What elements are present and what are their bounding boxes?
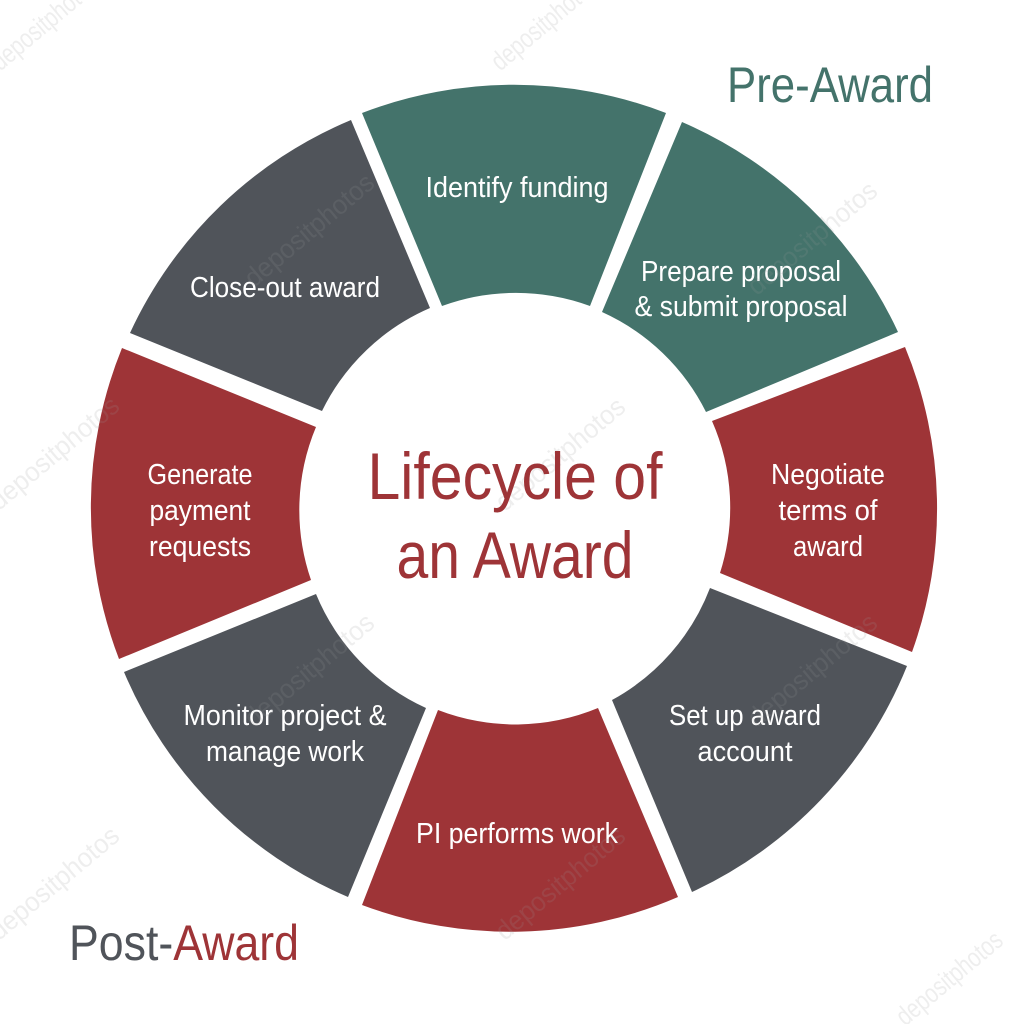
segment: Negotiate terms <box>712 347 937 652</box>
segment: Close-out award <box>130 120 430 411</box>
segment: Prepare proposal: Prepare proposal <box>641 256 841 288</box>
center title <box>368 439 663 592</box>
segment: Generate payment requests: requests <box>149 531 251 563</box>
segment: Generate payment requests <box>91 348 316 659</box>
watermarks: depositphotos <box>741 175 883 301</box>
segment: PI performs work: PI performs work <box>416 818 618 850</box>
segment: Prepare proposal: & submit proposal <box>634 291 848 323</box>
segment: Monitor project <box>124 594 426 897</box>
segment: Generate payment requests: Generate <box>148 459 252 491</box>
segment: Negotiate terms: terms of <box>778 495 878 527</box>
watermarks: depositphotos <box>238 607 380 733</box>
segment: Identify funding <box>362 85 666 306</box>
segment: PI performs work <box>362 708 678 932</box>
watermarks: depositphotos <box>741 607 883 733</box>
segment: Negotiate terms: award <box>793 531 863 563</box>
segment: Monitor project: manage work <box>206 736 364 768</box>
segment: Generate payment requests: payment <box>150 495 250 527</box>
segment: Negotiate terms: Negotiate <box>771 459 885 491</box>
watermarks: depositphotos <box>238 167 380 293</box>
segment: Monitor project: Monitor project & <box>184 700 386 732</box>
segment: Close-out award: Close-out award <box>190 272 380 304</box>
center title: an Award <box>396 518 634 592</box>
heading: Pre-Award: Pre-Award <box>727 57 933 113</box>
watermarks: depositphotos <box>489 391 631 517</box>
segment: Set up award account: Set up award <box>669 700 821 732</box>
segment: Set up award account <box>612 588 907 892</box>
center title: Lifecycle of <box>368 439 663 513</box>
segment: Prepare proposal <box>602 122 898 412</box>
watermarks: depositphotos <box>489 820 631 946</box>
segment: Identify funding: Identify funding <box>426 172 608 204</box>
heading: Post-Award: Post-Award <box>69 915 299 971</box>
segment: Set up award account: account <box>698 736 792 768</box>
